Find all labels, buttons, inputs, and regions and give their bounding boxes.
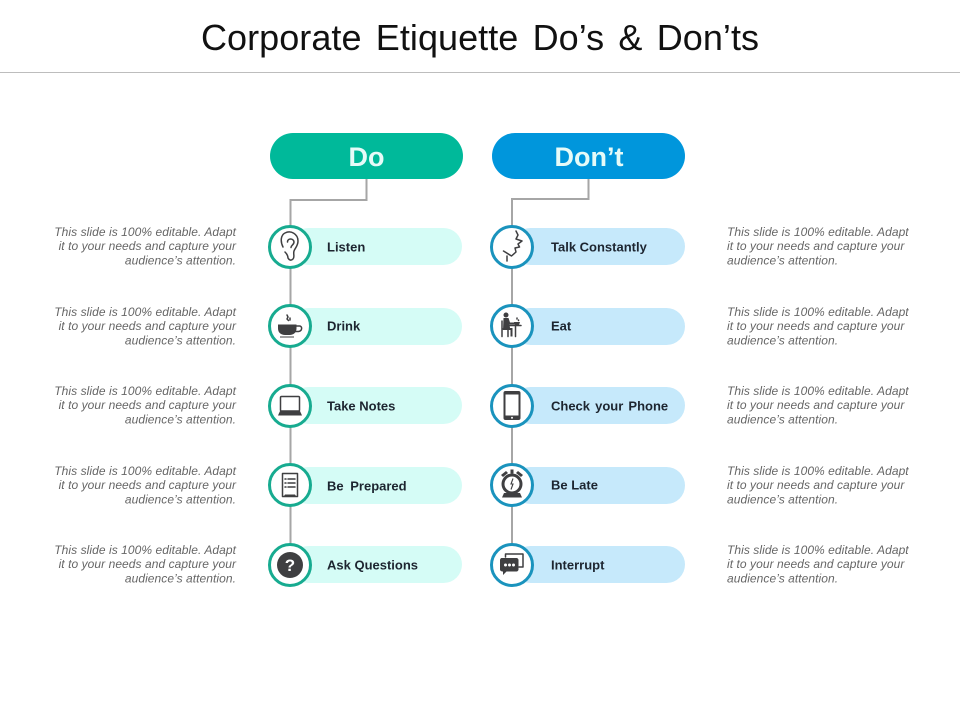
text block: left notes: it to your needs and capture your xyxy=(59,239,237,253)
connector: dont column xyxy=(512,179,588,565)
icon: ear xyxy=(281,232,298,260)
item: be late: Be Late xyxy=(551,478,598,492)
text block: left notes: This slide is 100% editable. Adapt xyxy=(54,464,237,478)
text block: right notes: audience’s attention. xyxy=(727,412,838,426)
text block: right notes: This slide is 100% editable. Adapt xyxy=(727,543,909,557)
item: listen: Listen xyxy=(327,240,365,254)
text block: left notes: it to your needs and capture your xyxy=(59,398,237,412)
text block: right notes: audience’s attention. xyxy=(727,254,838,268)
icon: checklist xyxy=(282,474,298,497)
text block: left notes: audience’s attention. xyxy=(125,572,236,586)
text block: left notes: This slide is 100% editable. Adapt xyxy=(54,225,237,239)
text block: right notes: This slide is 100% editable. Adapt xyxy=(727,225,909,239)
text block: right notes: it to your needs and capture your xyxy=(727,239,905,253)
text block: left notes: audience’s attention. xyxy=(125,412,236,426)
item: be prepared xyxy=(270,464,462,506)
text block: right notes: audience’s attention. xyxy=(727,492,838,506)
text block: right notes: it to your needs and capture your xyxy=(727,557,905,571)
text block: right notes: audience’s attention. xyxy=(727,572,838,586)
connector: do column xyxy=(290,179,366,565)
heading: dont xyxy=(492,133,685,179)
icon: question mark xyxy=(277,552,303,578)
text block: left notes: This slide is 100% editable. Adapt xyxy=(54,305,237,319)
item: eat xyxy=(492,306,685,346)
item: check your phone xyxy=(492,386,685,426)
item: drink: Drink xyxy=(327,318,361,334)
heading: do: Do xyxy=(348,142,384,172)
title: Corporate Etiquette Do’s & Don’ts xyxy=(201,17,759,58)
item: ask questions xyxy=(270,544,462,586)
text block: right notes: This slide is 100% editable. Adapt xyxy=(727,305,909,319)
text block: right notes xyxy=(727,225,909,586)
text block: left notes: it to your needs and capture your xyxy=(59,478,237,492)
text block: right notes: audience’s attention. xyxy=(727,334,838,348)
panel: dont column xyxy=(492,133,685,586)
item: be prepared: Be Prepared xyxy=(327,478,407,494)
text block: left notes: audience’s attention. xyxy=(125,492,236,506)
text block: left notes: This slide is 100% editable. Adapt xyxy=(54,543,237,557)
text block: right notes: This slide is 100% editable. Adapt xyxy=(727,464,909,478)
icon: person at table xyxy=(502,312,521,336)
item: ask questions: Ask Questions xyxy=(327,558,418,572)
panel: do column xyxy=(270,133,463,586)
text block: left notes: This slide is 100% editable. Adapt xyxy=(54,384,237,398)
text block: right notes: This slide is 100% editable. Adapt xyxy=(727,384,909,398)
text block: right notes: it to your needs and capture your xyxy=(727,398,905,412)
text block: left notes: audience’s attention. xyxy=(125,254,236,268)
icon: phone xyxy=(504,391,520,420)
icon: talking face xyxy=(504,231,522,261)
text block: right notes: it to your needs and capture your xyxy=(727,319,905,333)
item: check your phone: Check your Phone xyxy=(551,398,668,414)
icon: coffee cup xyxy=(278,315,302,338)
text block: right notes: it to your needs and capture your xyxy=(727,478,905,492)
text block: left notes: it to your needs and capture your xyxy=(59,557,237,571)
item: listen xyxy=(270,226,462,268)
item: talk constantly xyxy=(492,226,685,268)
item: talk constantly: Talk Constantly xyxy=(551,240,648,254)
icon: alarm clock xyxy=(501,470,523,498)
text block: left notes xyxy=(54,225,237,586)
text block: left notes: audience’s attention. xyxy=(125,334,236,348)
heading: dont: Don’t xyxy=(555,142,623,172)
item: interrupt xyxy=(492,544,685,586)
item: take notes xyxy=(270,386,462,426)
icon: question mark: ? xyxy=(285,556,295,575)
item: take notes: Take Notes xyxy=(327,398,395,414)
icon: speech bubbles xyxy=(500,554,523,575)
heading: do xyxy=(270,133,463,179)
text block: left notes: it to your needs and capture your xyxy=(59,319,237,333)
item: eat: Eat xyxy=(551,318,572,334)
item: be late xyxy=(492,464,685,506)
item: drink xyxy=(270,306,462,346)
icon: laptop xyxy=(278,396,302,416)
item: interrupt: Interrupt xyxy=(551,558,605,572)
